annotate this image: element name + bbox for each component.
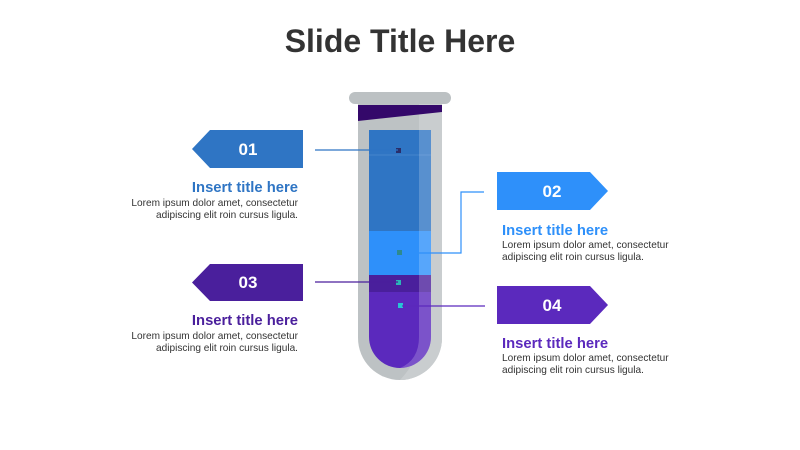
item 02: Lorem ipsum dolor amet, consectetur [502, 240, 669, 251]
item 04: Lorem ipsum dolor amet, consectetur [502, 353, 669, 364]
item 04 [497, 286, 669, 376]
item 03: adipiscing elit roin cursus ligula. [156, 343, 298, 354]
item 03: Lorem ipsum dolor amet, consectetur [131, 331, 299, 342]
item 01 [131, 130, 303, 221]
item 04: 04 [543, 296, 562, 315]
item 01: adipiscing elit roin cursus ligula. [156, 210, 298, 221]
item 03: 03 [239, 273, 257, 292]
item 04: Insert title here [502, 336, 608, 352]
item 01: 01 [239, 140, 257, 159]
item 04: adipiscing elit roin cursus ligula. [502, 365, 644, 376]
connectors [315, 150, 485, 306]
item 02 [497, 172, 669, 263]
item 01: Lorem ipsum dolor amet, consectetur [131, 198, 299, 209]
item 02: Insert title here [502, 223, 608, 239]
item 01: Insert title here [192, 180, 298, 196]
item 02: 02 [543, 182, 561, 201]
item 03: Insert title here [192, 313, 298, 329]
test tube [349, 92, 451, 380]
title: Slide Title Here [285, 23, 515, 59]
item 03 [131, 264, 303, 354]
item 02: adipiscing elit roin cursus ligula. [502, 252, 644, 263]
